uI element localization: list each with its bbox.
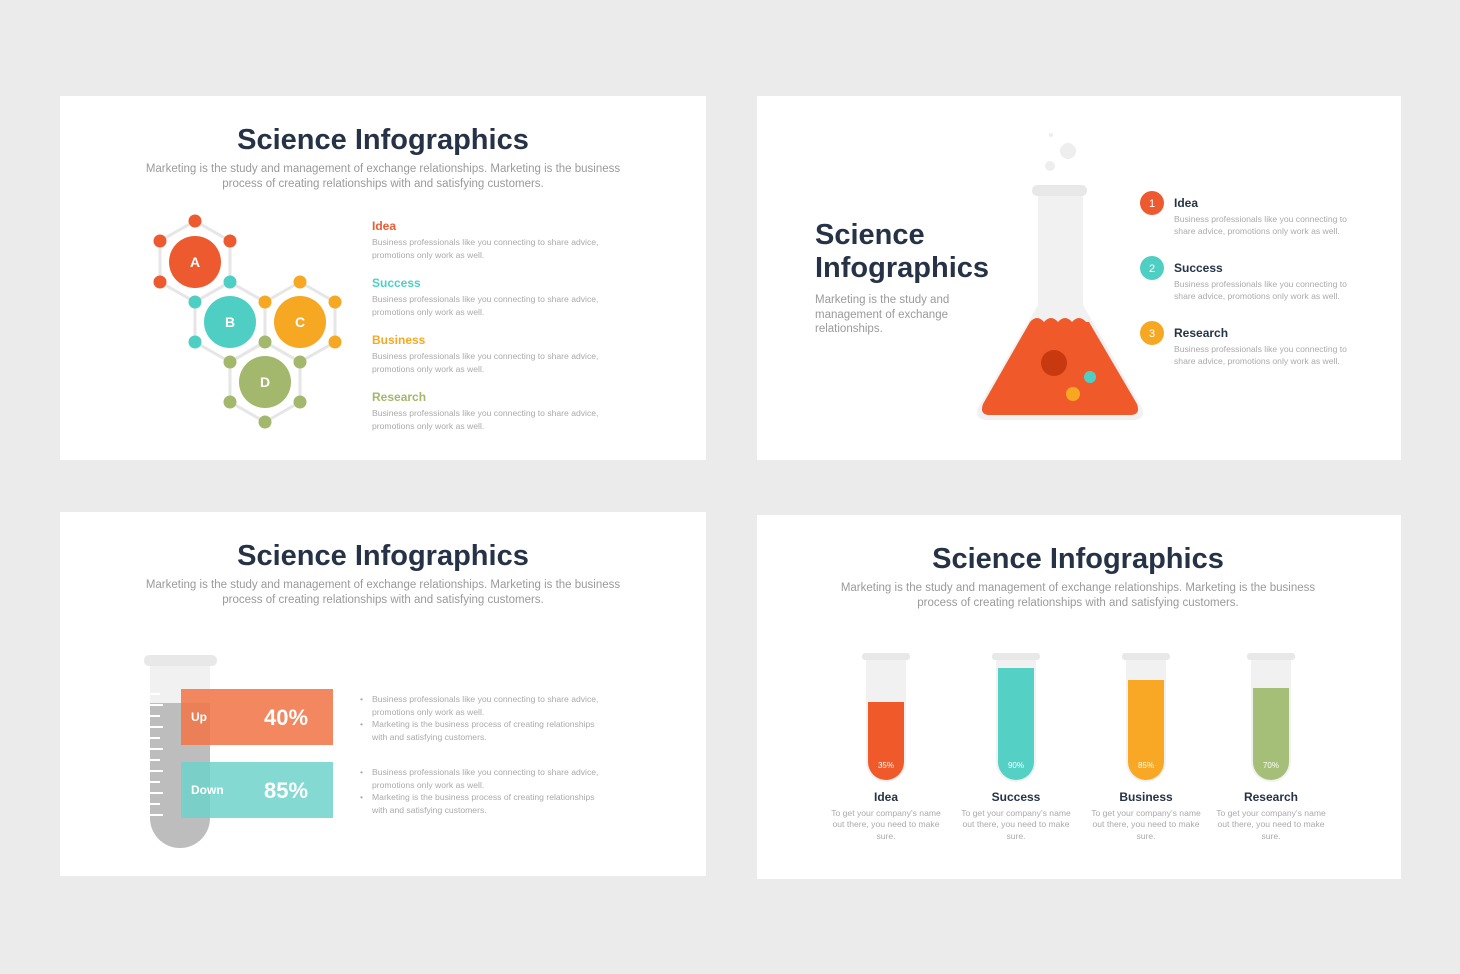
tube: idea: out there, you need to make (832, 819, 940, 829)
icon: flask (977, 133, 1143, 420)
tube: idea: To get your company's name (831, 808, 941, 818)
title: Infographics (815, 252, 989, 284)
text block: Marketing is the study and (815, 294, 949, 306)
subtitle: process of creating relationships with and satisfying customers. (222, 178, 544, 190)
tube: success: 90% (1008, 761, 1024, 770)
subtitle: process of creating relationships with and satisfying customers. (222, 594, 544, 606)
tube: idea: Idea (874, 790, 898, 804)
tube: success: To get your company's name (961, 808, 1071, 818)
panel: tubes chart (757, 515, 1401, 879)
tube: business: Business (1119, 790, 1173, 804)
molecule diagram: B (225, 314, 235, 330)
title: Science Infographics (932, 543, 1224, 575)
panel: test tube bars (60, 512, 706, 876)
molecule diagram: A (190, 254, 200, 270)
text block: management of exchange (815, 309, 948, 321)
list: numbered: share advice, promotions only work as well. (1174, 226, 1340, 236)
bullet text: promotions only work as well. (372, 707, 484, 717)
bar: up: 40% (264, 705, 308, 730)
list: numbered: Research (1174, 326, 1228, 340)
subtitle (841, 582, 1315, 609)
list: numbered (1140, 191, 1347, 366)
list: items (372, 219, 598, 431)
list: items: promotions only work as well. (372, 364, 484, 374)
subtitle (146, 163, 620, 190)
subtitle: Marketing is the study and management of exchange relationships. Marketing is the business (146, 163, 620, 175)
bullet text: • (360, 719, 363, 729)
list: numbered: share advice, promotions only work as well. (1174, 356, 1340, 366)
list: numbered: Business professionals like you connecting to (1174, 214, 1347, 224)
tube: business: sure. (1136, 831, 1156, 841)
tube: business: To get your company's name (1091, 808, 1201, 818)
list: items: Research (372, 390, 426, 404)
subtitle: process of creating relationships with and satisfying customers. (917, 597, 1239, 609)
subtitle (146, 579, 620, 606)
list: items: Business professionals like you connecting to share advice, (372, 294, 598, 304)
tube: success (961, 653, 1071, 841)
list: numbered: Business professionals like you connecting to (1174, 279, 1347, 289)
list: numbered: 2 (1149, 263, 1155, 275)
tube: research: sure. (1261, 831, 1281, 841)
text block: relationships. (815, 323, 883, 335)
bullet text: Business professionals like you connecting to share advice, (372, 694, 598, 704)
bar: down (181, 762, 333, 818)
text block (815, 294, 949, 335)
tube: success: Success (992, 790, 1041, 804)
list: items: promotions only work as well. (372, 421, 484, 431)
icon: test tube (144, 655, 217, 848)
tube: research: To get your company's name (1216, 808, 1326, 818)
bullet text: Marketing is the business process of creating relationships (372, 719, 595, 729)
title: Science (815, 219, 925, 251)
bar: up: Up (191, 710, 207, 724)
tube: research: out there, you need to make (1217, 819, 1325, 829)
list: numbered: 3 (1149, 328, 1155, 340)
subtitle: Marketing is the study and management of exchange relationships. Marketing is the business (146, 579, 620, 591)
tube: idea (831, 653, 941, 841)
bar: up (181, 689, 333, 745)
subtitle: Marketing is the study and management of exchange relationships. Marketing is the business (841, 582, 1315, 594)
tube: business: 85% (1138, 761, 1154, 770)
bullet text: • (360, 767, 363, 777)
tube: research: 70% (1263, 761, 1279, 770)
list: items: Success (372, 276, 421, 290)
tube: success: out there, you need to make (962, 819, 1070, 829)
tube: idea: 35% (878, 761, 894, 770)
bullet text: • (360, 792, 363, 802)
list: items: promotions only work as well. (372, 250, 484, 260)
list: numbered: Idea (1174, 196, 1198, 210)
bar: down: Down (191, 783, 224, 797)
list: items: Business professionals like you connecting to share advice, (372, 408, 598, 418)
tube: business: out there, you need to make (1092, 819, 1200, 829)
bullet text (360, 694, 598, 815)
list: numbered: share advice, promotions only work as well. (1174, 291, 1340, 301)
bullet text: Marketing is the business process of creating relationships (372, 792, 595, 802)
title: Science Infographics (237, 540, 529, 572)
panel: molecule (60, 96, 706, 460)
list: numbered: Success (1174, 261, 1223, 275)
bar: down: 85% (264, 778, 308, 803)
bullet text: promotions only work as well. (372, 780, 484, 790)
tube: success: sure. (1006, 831, 1026, 841)
bullet text: with and satisfying customers. (371, 732, 487, 742)
list: items: Business professionals like you connecting to share advice, (372, 237, 598, 247)
bullet text: with and satisfying customers. (371, 805, 487, 815)
list: items: Idea (372, 219, 396, 233)
bullet text: • (360, 694, 363, 704)
title (815, 219, 989, 284)
tube: business (1091, 653, 1201, 841)
tube: idea: sure. (876, 831, 896, 841)
tube: research (1216, 653, 1326, 841)
tube: research: Research (1244, 790, 1298, 804)
molecule diagram: D (260, 374, 270, 390)
list: items: promotions only work as well. (372, 307, 484, 317)
bullet text: Business professionals like you connecting to share advice, (372, 767, 598, 777)
molecule diagram (154, 214, 342, 428)
list: items: Business (372, 333, 426, 347)
title: Science Infographics (237, 124, 529, 156)
molecule diagram: C (295, 314, 305, 330)
list: numbered: Business professionals like you connecting to (1174, 344, 1347, 354)
list: items: Business professionals like you connecting to share advice, (372, 351, 598, 361)
list: numbered: 1 (1149, 198, 1155, 210)
panel: flask (757, 96, 1401, 460)
